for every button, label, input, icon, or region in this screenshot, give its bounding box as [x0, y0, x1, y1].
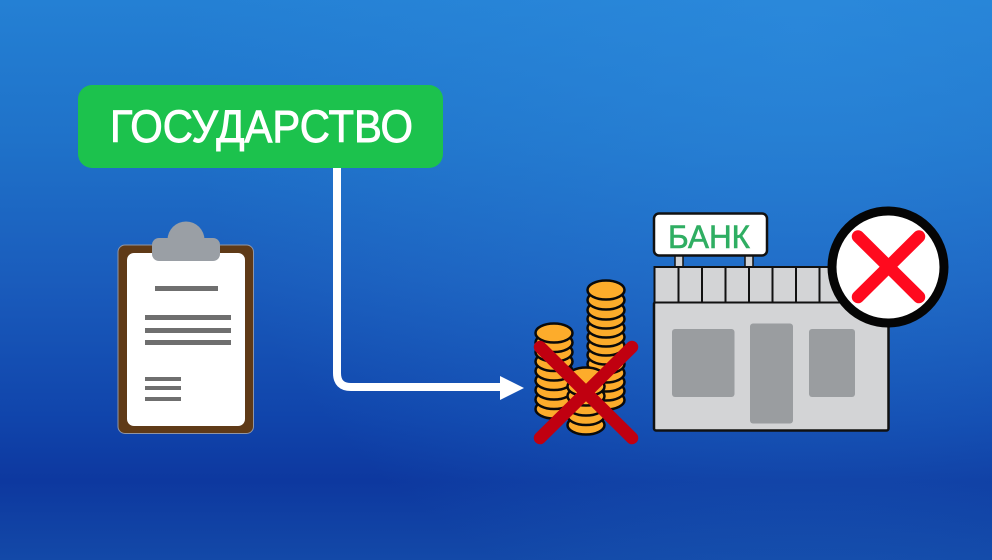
left coin stack [536, 324, 572, 418]
icon: red cross in circle [832, 211, 944, 323]
bank sign [654, 214, 767, 256]
heading: state label [78, 85, 443, 168]
arrow: state to coins [337, 166, 524, 400]
heading: state label: ГОСУДАРСТВО [110, 101, 413, 152]
icon: bank building [654, 214, 888, 430]
bank sign: БАНК [668, 219, 750, 255]
bank fascia [654, 267, 888, 302]
right coin stack [588, 280, 624, 410]
front coin stack [568, 368, 604, 434]
bank sign posts [675, 255, 753, 267]
bank body [654, 302, 888, 430]
red cross over coins [540, 347, 632, 438]
icon: coin stacks crossed out [536, 280, 632, 438]
icon: clipboard document [118, 222, 254, 434]
